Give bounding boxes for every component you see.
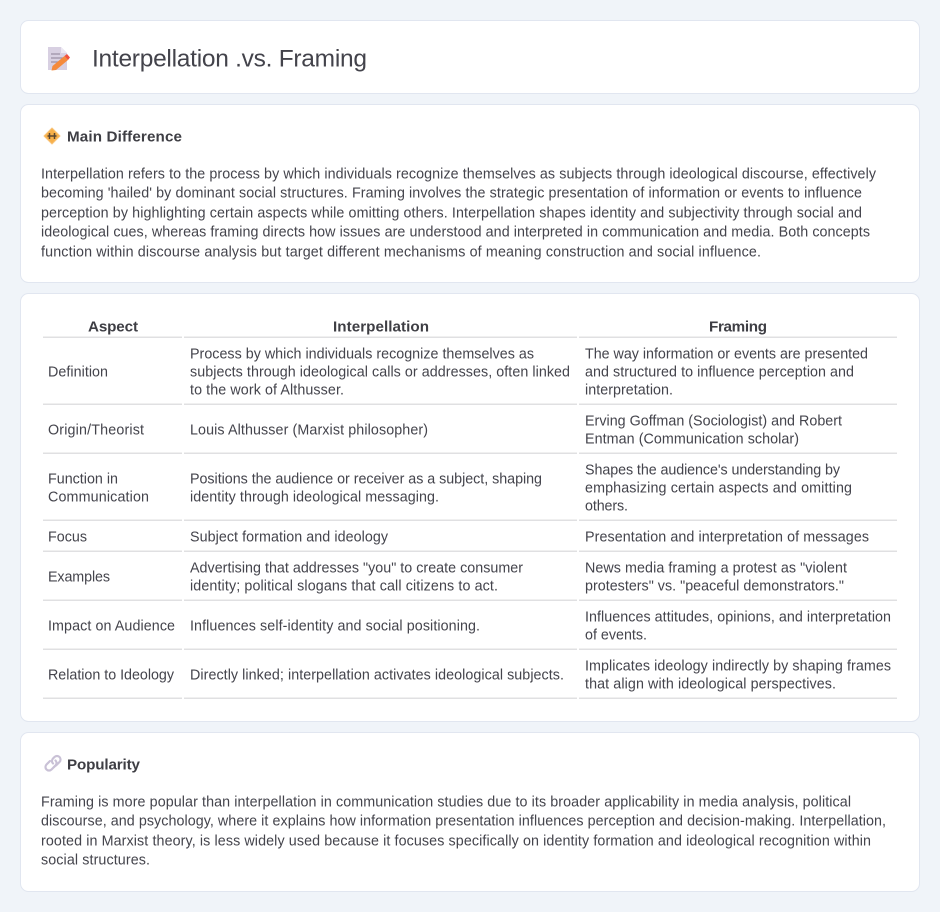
row: definition: and structured to influence perception and: [585, 364, 854, 380]
row: examples: protesters" vs. "peaceful demonstrators.": [585, 578, 844, 594]
row: impact on audience: of events.: [585, 628, 647, 644]
panel: main difference: [20, 104, 920, 282]
row: definition: interpretation.: [585, 382, 673, 398]
row: impact on audience: Influences attitudes, opinions, and interpretation: [585, 610, 891, 626]
row: relation to ideology: [48, 658, 891, 692]
row: focus: Presentation and interpretation of messages: [585, 530, 869, 546]
row: function in communication: [48, 462, 852, 514]
row: definition: The way information or events are presented: [585, 346, 868, 362]
text block: main difference: ideological cues, whereas framing directs how issues are understood and interpreted in communication and media. Both concepts: [41, 224, 870, 240]
row: focus: Subject formation and ideology: [190, 530, 389, 546]
row: relation to ideology: that align with ideological perspectives.: [585, 676, 836, 692]
row: examples: identity; political slogans that call citizens to act.: [190, 578, 498, 594]
row: impact on audience: [48, 610, 891, 644]
table header row: Framing: [709, 318, 767, 336]
text block: popularity: Framing is more popular than interpellation in communication studies due to its broader applicability in media analysis, political: [41, 794, 851, 810]
text block: popularity: rooted in Marxist theory, is less widely used because it focuses specifically on identity formation and ideological recognition within: [41, 834, 871, 850]
text block: popularity: discourse, and psychology, where it explains how information presentation influences perception and decision-making. Interpellation,: [41, 814, 886, 830]
icon: link: [45, 756, 61, 771]
row: function in communication: others.: [585, 498, 628, 514]
row: function in communication: identity through ideological messaging.: [190, 490, 439, 506]
row: definition: Process by which individuals recognize themselves as: [190, 346, 534, 362]
table header row: Interpellation: [333, 318, 429, 336]
row: function in communication: Positions the audience or receiver as a subject, shaping: [190, 472, 542, 488]
text block: main difference: perception by highlighting certain aspects while omitting others. Interpellation shapes identity and subjectivity through social and: [41, 206, 862, 222]
text block: main difference: Interpellation refers to the process by which individuals recognize themselves as subjects through ideological discourse, effectively: [41, 166, 877, 182]
row: impact on audience: Impact on Audience: [48, 618, 175, 634]
row: impact on audience: Influences self-identity and social positioning.: [190, 618, 480, 634]
row: function in communication: Shapes the audience's understanding by: [585, 462, 841, 478]
row: examples: [48, 560, 847, 594]
row: relation to ideology: Directly linked; interpellation activates ideological subjects.: [190, 668, 564, 684]
row: definition: to the work of Althusser.: [190, 382, 344, 398]
table header row: [88, 318, 767, 336]
text block: main difference: function within discourse analysis but target different mechanisms of meaning construction and social influence.: [41, 244, 761, 260]
panel: title header: [20, 20, 920, 94]
row: definition: subjects through ideological calls or addresses, often linked: [190, 364, 570, 380]
heading: main difference: Main Difference: [67, 128, 182, 146]
panel: comparison table: [20, 294, 920, 722]
text block: main difference: [41, 166, 877, 260]
row: function in communication: Function in: [48, 472, 118, 488]
text block: popularity: [41, 794, 886, 868]
icon: memo with pencil: [48, 47, 70, 70]
heading: popularity: Popularity: [67, 756, 141, 774]
icon: warning diamond: [44, 128, 60, 144]
row: origin/theorist: Louis Althusser (Marxist philosopher): [190, 422, 428, 438]
row: origin/theorist: [48, 414, 842, 448]
row: focus: Focus: [48, 530, 87, 546]
row: examples: News media framing a protest as "violent: [585, 560, 847, 576]
row: focus: [48, 530, 869, 546]
row: origin/theorist: Entman (Communication scholar): [585, 432, 799, 448]
row: origin/theorist: Origin/Theorist: [48, 422, 144, 438]
row: relation to ideology: Implicates ideology indirectly by shaping frames: [585, 658, 891, 674]
title: Interpellation .vs. Framing: [92, 46, 367, 72]
row: examples: Examples: [48, 570, 110, 586]
row: definition: [48, 346, 868, 398]
text block: popularity: social structures.: [41, 852, 150, 868]
row: examples: Advertising that addresses "you" to create consumer: [190, 560, 523, 576]
table header row: Aspect: [88, 318, 138, 336]
row: origin/theorist: Erving Goffman (Sociologist) and Robert: [585, 414, 842, 430]
row: relation to ideology: Relation to Ideology: [48, 668, 175, 684]
row: function in communication: Communication: [48, 490, 149, 506]
panel: popularity: [20, 732, 920, 892]
row: function in communication: emphasizing certain aspects and omitting: [585, 480, 852, 496]
text block: main difference: becoming 'hailed' by dominant social structures. Framing involves the strategic presentation of information or events to influence: [41, 186, 862, 202]
row: definition: Definition: [48, 364, 108, 380]
